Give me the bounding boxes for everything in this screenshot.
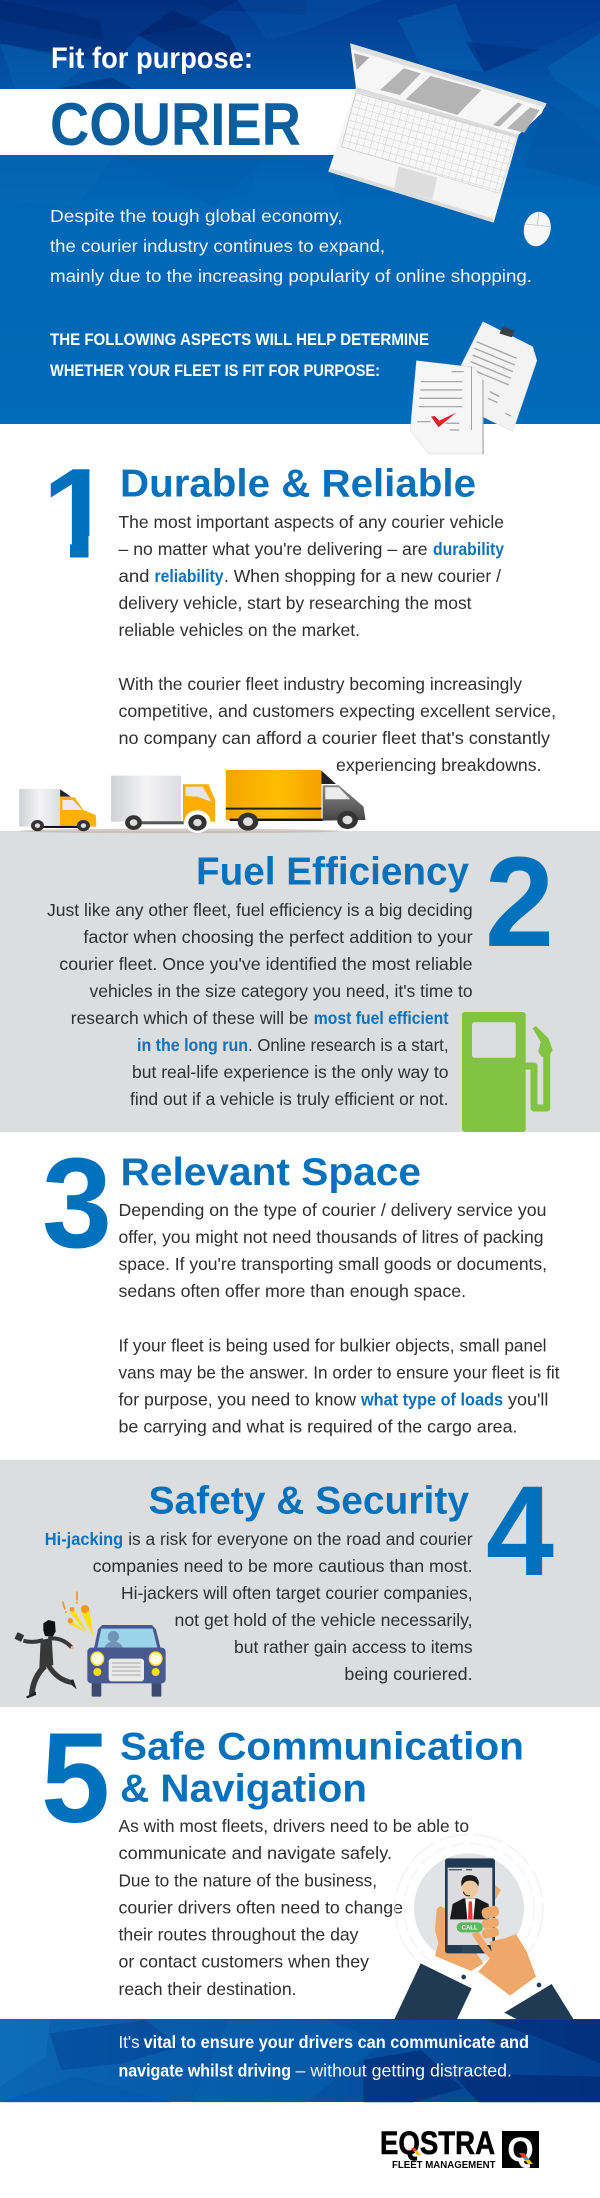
numeral 1: 1 (42, 443, 113, 586)
numeral 4: 4 (486, 1460, 554, 1603)
body text: offer, you might not need thousands of litres of packing (118, 1227, 544, 1247)
panel: header (0, 0, 600, 454)
body text (45, 1529, 473, 1684)
body text: sedans often offer more than enough space. (118, 1281, 466, 1301)
body text: is a risk for everyone on the road and courier (128, 1529, 473, 1549)
logo: Eqstra Fleet Management: Q (507, 2131, 534, 2169)
illustration: hands holding phone: CALL (462, 1925, 478, 1931)
intro text: the courier industry continues to expand, (50, 236, 385, 256)
body text: If your fleet is being used for bulkier objects, small panel (118, 1336, 546, 1356)
body text: reach their destination. (118, 1979, 296, 1999)
body text: factor when choosing the perfect addition to your (83, 927, 473, 947)
icon: mouse (521, 210, 553, 248)
body text: reliability (154, 566, 224, 586)
icon: documents (410, 322, 537, 454)
body text: Hi-jackers will often target courier companies, (121, 1583, 473, 1603)
body text: The most important aspects of any courier vehicle (118, 512, 504, 532)
body text (47, 900, 473, 1109)
body text: no company can afford a courier fleet that's constantly (118, 728, 550, 748)
heading: Fuel Efficiency (196, 850, 469, 894)
heading: Safety & Security (148, 1479, 469, 1522)
body text: not get hold of the vehicle necessarily, (174, 1610, 473, 1630)
lead-in text: THE FOLLOWING ASPECTS WILL HELP DETERMINE (50, 331, 429, 349)
body text: – no matter what you're delivering – are (118, 539, 428, 559)
body text: vehicles in the size category you need, it's time to (90, 981, 473, 1001)
body text: delivery vehicle, start by researching the most (118, 593, 472, 613)
body text (118, 512, 556, 775)
body text: find out if a vehicle is truly efficient or not. (130, 1089, 448, 1109)
closing message: It's (118, 2032, 140, 2052)
body text: Hi-jacking (45, 1529, 123, 1549)
logo: Eqstra Fleet Management (380, 2125, 539, 2171)
body text: courier fleet. Once you've identified the most reliable (59, 954, 473, 974)
illustration: three delivery trucks (19, 770, 365, 833)
body text: . Online research is a start, (248, 1035, 448, 1055)
body text: and (118, 566, 150, 586)
icon: fuel pump (462, 1012, 553, 1132)
body text (118, 1816, 469, 1999)
heading: fit for purpose: Fit for purpose: (51, 42, 253, 75)
body text: but rather gain access to items (234, 1637, 473, 1657)
body text: research which of these will be (71, 1008, 308, 1028)
body text: you'll (508, 1390, 548, 1410)
lead-in text: WHETHER YOUR FLEET IS FIT FOR PURPOSE: (50, 362, 380, 380)
section 3: relevant space (42, 1132, 560, 1436)
body text: With the courier fleet industry becoming increasingly (118, 674, 522, 694)
heading (120, 1725, 524, 1811)
logo: Eqstra Fleet Management: FLEET MANAGEMENT (392, 2160, 496, 2171)
footer band (0, 2019, 600, 2102)
body text: most fuel efficient (314, 1008, 449, 1028)
icon: laptop (328, 43, 546, 223)
intro text: mainly due to the increasing popularity of online shopping. (50, 266, 532, 286)
body text: for purpose, you need to know (118, 1390, 356, 1410)
body text: vans may be the answer. In order to ensure your fleet is fit (118, 1362, 560, 1382)
closing message (118, 2032, 529, 2081)
lead-in text (50, 331, 429, 380)
intro text: Despite the tough global economy, (50, 206, 342, 226)
section 1: durable and reliable (42, 443, 556, 775)
closing message: navigate whilst driving (118, 2061, 291, 2081)
closing message: – without getting distracted. (296, 2061, 512, 2081)
body text (118, 1200, 560, 1436)
body text: be carrying and what is required of the cargo area. (118, 1416, 518, 1436)
body text: but real-life experience is the only way to (132, 1062, 448, 1082)
body text: Just like any other fleet, fuel efficiency is a big deciding (47, 900, 473, 920)
heading: Safe Communication (120, 1725, 524, 1768)
body text: reliable vehicles on the market. (118, 620, 360, 640)
section 4: safety and security (0, 1460, 600, 1707)
body text: courier drivers often need to change (118, 1898, 403, 1918)
body text: companies need to be more cautious than most. (93, 1556, 473, 1576)
closing message: vital to ensure your drivers can communicate and (144, 2032, 529, 2052)
intro text (50, 206, 532, 286)
section 2: fuel efficiency (47, 831, 554, 1132)
illustration: hijacker and car (14, 1592, 166, 1698)
section 5: safe communication and navigation (41, 1707, 524, 1999)
body text: communicate and navigate safely. (118, 1843, 392, 1863)
panel background (0, 1460, 600, 1707)
body text: being couriered. (344, 1664, 473, 1684)
body text: their routes throughout the day (118, 1924, 359, 1944)
body text: As with most fleets, drivers need to be able to (118, 1816, 469, 1836)
body text: what type of loads (360, 1390, 503, 1410)
body text: experiencing breakdowns. (336, 755, 542, 775)
body text: or contact customers when they (118, 1952, 369, 1972)
body text: competitive, and customers expecting excellent service, (118, 701, 556, 721)
panel: section 2 background (0, 831, 600, 1132)
body text: Due to the nature of the business, (118, 1870, 377, 1890)
heading: & Navigation (120, 1768, 367, 1811)
body text: in the long run (137, 1035, 248, 1055)
numeral 2: 2 (485, 831, 554, 974)
body text: . When shopping for a new courier / (224, 566, 501, 586)
logo: Eqstra Fleet Management: EQSTRA (380, 2125, 495, 2161)
body text: Depending on the type of courier / delivery service you (118, 1200, 546, 1220)
illustration: hands holding phone (394, 1834, 574, 2020)
numeral 3: 3 (42, 1132, 112, 1275)
body text: durability (433, 539, 504, 559)
body text: space. If you're transporting small goods or documents, (118, 1254, 547, 1274)
heading: Durable & Reliable (120, 463, 476, 506)
numeral 5: 5 (41, 1707, 110, 1850)
heading band: courier: COURIER (50, 91, 301, 158)
heading: Relevant Space (120, 1151, 421, 1194)
